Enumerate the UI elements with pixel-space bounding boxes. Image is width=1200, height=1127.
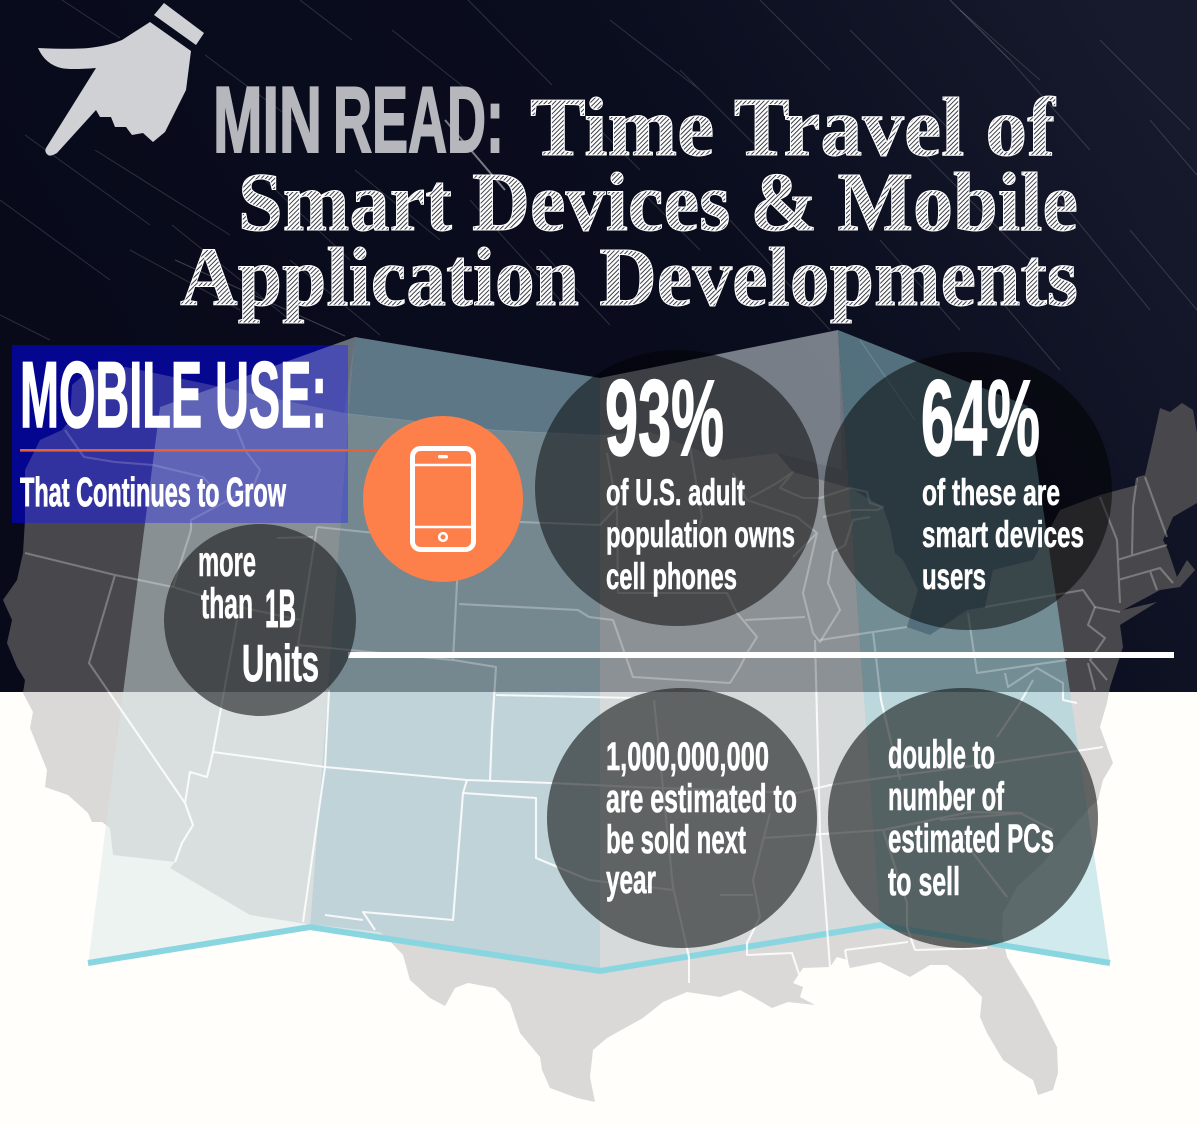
- callout: one billion units sold: be sold next: [606, 818, 746, 862]
- panel bottom edge: [88, 925, 1110, 971]
- title line 3: Application Developments: [180, 231, 1078, 324]
- callout: 93 percent: population owns: [606, 514, 795, 555]
- panel: second fold: [310, 337, 600, 972]
- panel: third fold upper highlight: [600, 330, 842, 470]
- callout: one billion units sold: 1,000,000,000: [606, 735, 769, 779]
- callout: 64 percent: 64%: [921, 357, 1040, 478]
- callout: more than 1B units: more: [198, 538, 256, 586]
- callout: double PCs: double to: [888, 733, 995, 777]
- callout: more than 1B units: 1B: [265, 579, 296, 639]
- title tag: min read: MIN: [213, 67, 322, 172]
- callout: double PCs: to sell: [888, 860, 960, 904]
- callout: double PCs: estimated PCs: [888, 817, 1054, 861]
- title tag: min read: READ:: [333, 67, 504, 172]
- icon: pointing hand: [38, 3, 204, 156]
- callout: double PCs: [828, 688, 1098, 948]
- callout: more than 1B units: than: [201, 580, 253, 628]
- icon: smartphone on orange circle: [363, 416, 523, 582]
- callout: more than 1B units: [164, 524, 356, 716]
- callout: 64 percent: users: [922, 556, 986, 597]
- title: [180, 67, 1078, 324]
- callout: one billion units sold: [547, 688, 817, 948]
- panel: second fold upper highlight: [344, 337, 600, 436]
- hand cuff: [154, 3, 204, 45]
- subheading: That Continues to Grow: [20, 469, 286, 515]
- callout: 93 percent: [535, 350, 819, 626]
- callout: more than 1B units: Units: [242, 635, 319, 693]
- callout: 93 percent: 93%: [605, 357, 724, 478]
- hand shape: [38, 22, 191, 156]
- callout: double PCs: number of: [888, 775, 1004, 819]
- panel: right outer fold: [838, 330, 1110, 963]
- callout: one billion units sold: are estimated to: [606, 777, 797, 821]
- panel: third fold: [600, 330, 880, 972]
- title line 1: Time Travel of: [530, 81, 1056, 174]
- title line 2: Smart Devices & Mobile: [238, 156, 1078, 249]
- panel: left outer fold: [88, 337, 355, 965]
- folded map panels: [88, 330, 1110, 972]
- map of the United States silhouette: [3, 367, 1197, 1102]
- callout: one billion units sold: year: [606, 858, 656, 902]
- title tag: min read: [213, 67, 504, 172]
- callout: 64 percent: of these are: [922, 472, 1060, 513]
- white divider line: [348, 652, 1174, 658]
- callout: 64 percent: [824, 352, 1112, 630]
- callout: 93 percent: of U.S. adult: [606, 472, 745, 513]
- panel: mobile use heading box: MOBILE USE:: [20, 342, 327, 447]
- state boundary lines: [25, 407, 1173, 983]
- decorative rain streaks: [0, 0, 1197, 420]
- callout: 93 percent: cell phones: [606, 556, 737, 597]
- panel: mobile use heading box: [12, 342, 348, 523]
- orange connector line: [20, 449, 382, 452]
- dark night sky background band: [0, 0, 1197, 692]
- callout: 64 percent: smart devices: [922, 514, 1084, 555]
